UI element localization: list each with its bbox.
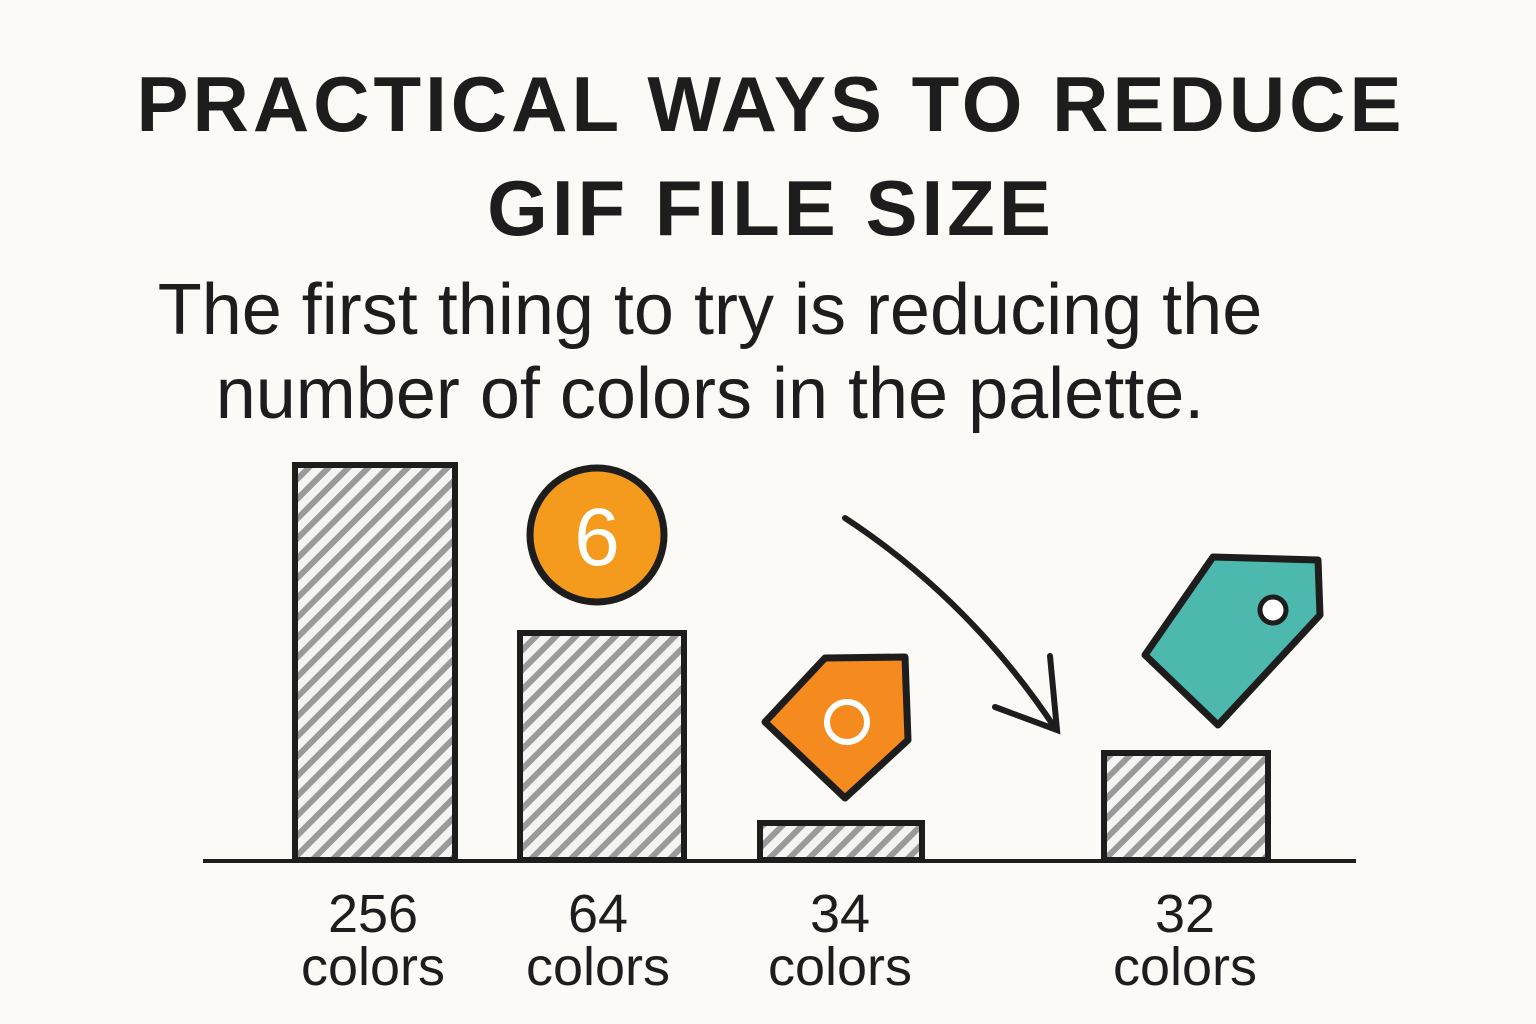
labels: colors xyxy=(1113,937,1257,997)
icon: teal tag xyxy=(1145,557,1320,725)
labels: colors xyxy=(301,937,445,997)
labels: colors xyxy=(526,937,670,997)
icon: orange tag xyxy=(765,657,908,798)
labels: colors xyxy=(768,937,912,997)
labels: 32 xyxy=(1155,884,1215,944)
icon: coin 6: 6 xyxy=(574,492,620,583)
icon: coin 6 xyxy=(530,468,664,602)
arrow xyxy=(845,518,1057,730)
bars xyxy=(295,465,1268,860)
labels: 256 xyxy=(328,884,418,944)
subtitle xyxy=(158,270,1262,434)
subtitle: The first thing to try is reducing the xyxy=(158,270,1262,350)
title: GIF FILE SIZE xyxy=(487,164,1055,252)
labels: 34 xyxy=(810,884,870,944)
labels xyxy=(301,884,1257,997)
labels: 64 xyxy=(568,884,628,944)
title: PRACTICAL WAYS TO REDUCE xyxy=(136,60,1406,148)
subtitle: number of colors in the palette. xyxy=(216,354,1204,434)
title xyxy=(136,60,1406,252)
baseline xyxy=(203,859,1356,863)
